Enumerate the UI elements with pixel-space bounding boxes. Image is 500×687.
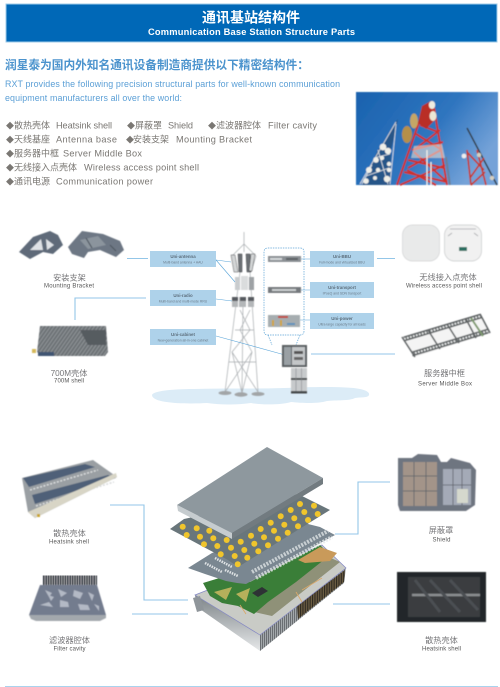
product: 700M shell (32, 326, 108, 356)
parts list (6, 120, 317, 186)
parts list: ◆ (6, 178, 14, 186)
diagram: base station network (150, 232, 374, 404)
power device (268, 315, 300, 327)
caption: heatsink shell right: Heatsink shell (422, 646, 461, 652)
label: Uni-radio: Multi-band and multi-mode RRU (159, 300, 208, 304)
caption: 700M shell (51, 368, 87, 384)
exploded view: base station module (170, 447, 346, 651)
parts list: 滤波器腔体 (216, 120, 261, 130)
label: Uni-power: Ultra-large capacity for all loads (318, 322, 366, 326)
front connectors (193, 596, 204, 612)
product: server middle box (402, 314, 490, 357)
right tower (462, 128, 497, 185)
caption: server middle box: 服务器中框 (424, 368, 465, 378)
caption: heatsink shell right (422, 635, 461, 652)
PCB green board (203, 545, 330, 614)
label: Uni-antenna (150, 251, 216, 267)
parts list: ◆ (208, 122, 216, 130)
product: heatsink shell left (22, 460, 117, 518)
label: Uni-BBU: Uni-BBU (333, 254, 351, 259)
top cover plate (177, 447, 323, 533)
label: Uni-transport: IPoeQ and SDN transport (323, 292, 361, 296)
parts list: ◆ (6, 150, 14, 158)
intro paragraph (5, 79, 340, 103)
caption: 700M shell: 700M壳体 (51, 368, 87, 378)
product: heatsink shell right (397, 572, 486, 622)
shield layer (188, 522, 335, 584)
tray top (195, 545, 346, 635)
parts list: ◆ (6, 136, 14, 144)
parts list: ◆ (6, 164, 14, 172)
label: Uni-BBU: Full-mode and virtualized BBU (319, 260, 365, 264)
label: Uni-power (310, 313, 374, 329)
label: Uni-radio: Uni-radio (173, 293, 193, 298)
parts list: Filter cavity (268, 120, 317, 130)
connector lines (216, 259, 310, 355)
parts list: Mounting Bracket (176, 134, 252, 144)
gold contact layer (170, 494, 330, 567)
intro paragraph: RXT provides the following precision structural parts for well-known communication (5, 79, 340, 89)
label: Uni-transport (310, 282, 374, 298)
label: Uni-transport: Uni-transport (328, 285, 356, 290)
base tray left face (195, 595, 260, 651)
antennas (231, 254, 255, 272)
cloud ground (152, 387, 369, 404)
label: Uni-cabinet: Uni-cabinet (171, 332, 195, 337)
title banner (6, 4, 497, 42)
intro paragraph: equipment manufacturers all over the world: (5, 93, 182, 103)
left white tower (360, 119, 398, 185)
dashed bay outline (264, 248, 304, 345)
caption: mounting bracket: 安装支架 (53, 272, 86, 282)
caption: mounting bracket (44, 272, 94, 290)
product: mounting bracket (19, 231, 124, 259)
label: Uni-radio (150, 290, 216, 306)
caption: mounting bracket: Mounting Bracket (44, 284, 94, 290)
parts list: Heatsink shell (56, 120, 112, 130)
RRU units (232, 297, 254, 307)
parts list: Server Middle Box (63, 148, 142, 158)
caption: filter cavity: 滤波器腔体 (49, 635, 90, 645)
tower (218, 232, 264, 397)
cabinet (282, 345, 307, 394)
parts list: 无线接入点壳体 (14, 162, 77, 172)
label: Uni-cabinet: New-generation all-in-one cabinet (158, 338, 208, 342)
product: wireless access point (402, 225, 482, 261)
photo: telecom towers against blue sky (356, 92, 498, 185)
product: filter cavity (29, 578, 106, 621)
dish antennas (402, 101, 436, 143)
parts list: 天线基座 (14, 134, 50, 144)
title: English: Communication Base Station Structure Parts (148, 27, 355, 37)
thin distant tower (446, 157, 450, 185)
caption: heatsink shell left: Heatsink shell (49, 540, 89, 546)
label: Uni-BBU (310, 251, 374, 267)
parts list: ◆ (126, 136, 134, 144)
caption: 700M shell: 700M shell (54, 378, 84, 384)
parts list: Shield (168, 120, 193, 130)
parts list: 屏蔽罩 (135, 120, 162, 130)
parts list: ◆ (127, 122, 135, 130)
caption: heatsink shell left: 散热壳体 (53, 528, 86, 538)
title: Chinese: 通讯基站结构件 (202, 10, 300, 26)
caption: wireless access point (406, 272, 482, 290)
caption: shield (429, 525, 453, 544)
leader lines: upper diagram (75, 258, 395, 354)
intro heading: 润星泰为国内外知名通讯设备制造商提供以下精密结构件： (5, 58, 309, 72)
label: Uni-cabinet (150, 329, 216, 345)
AAU units (235, 276, 254, 290)
heat fins right side (260, 568, 346, 651)
label: Uni-power: Uni-power (331, 316, 353, 321)
parts list: 服务器中框 (14, 148, 59, 158)
caption: shield: Shield (432, 538, 450, 544)
caption: server middle box (418, 368, 472, 388)
transport device (268, 287, 301, 293)
caption: heatsink shell right: 散热壳体 (425, 635, 458, 645)
caption: wireless access point: Wireless access point shell (406, 284, 482, 290)
red lattice tower (397, 108, 447, 185)
caption: wireless access point: 无线接入点壳体 (419, 272, 477, 282)
parts list: 通讯电源 (14, 176, 50, 186)
caption: filter cavity (49, 635, 90, 652)
label: Uni-antenna: Multi-band antenna + AAU (163, 260, 203, 264)
caption: heatsink shell left (49, 528, 89, 546)
parts list: Communication power (56, 176, 153, 186)
parts list: Antenna base (56, 134, 117, 144)
label: Uni-antenna: Uni-antenna (170, 254, 196, 259)
parts list: 散热壳体 (14, 120, 50, 130)
parts list: Wireless access point shell (84, 162, 199, 172)
olive board area (254, 556, 340, 616)
leader lines: lower diagram (110, 482, 390, 614)
product: shield (398, 454, 476, 511)
BBU device (268, 256, 301, 262)
caption: filter cavity: Filter cavity (54, 646, 86, 652)
parts list: 安装支架 (133, 134, 169, 144)
parts list: ◆ (6, 122, 14, 130)
caption: server middle box: Server Middle Box (418, 382, 472, 388)
caption: shield: 屏蔽罩 (429, 525, 453, 535)
